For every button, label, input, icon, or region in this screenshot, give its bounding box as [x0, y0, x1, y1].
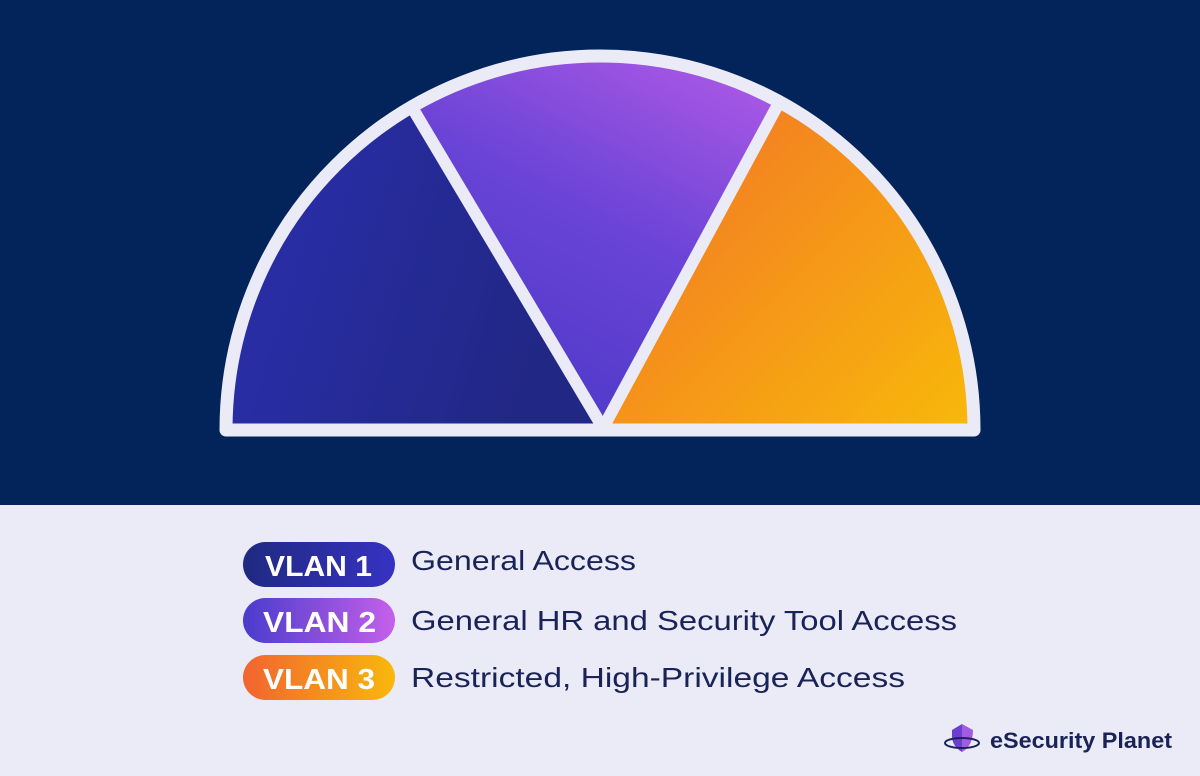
background: top dark band — [0, 0, 1200, 505]
segment: VLAN 3 — [612, 110, 968, 424]
icon: shield — [945, 724, 979, 752]
legend — [243, 542, 957, 700]
legend item: VLAN 3: Restricted, High-Privilege Access — [411, 662, 905, 693]
legend item: VLAN 1: General Access — [411, 545, 636, 576]
logo: eSecurity Planet — [945, 724, 1173, 753]
legend item: VLAN 1 — [243, 542, 636, 587]
legend item: VLAN 2: General HR and Security Tool Access — [411, 605, 957, 636]
legend item: VLAN 1: VLAN 1 — [265, 551, 372, 583]
segment: VLAN 1 — [232, 116, 594, 424]
legend item: VLAN 2: VLAN 2 — [263, 607, 376, 639]
legend item: VLAN 3: VLAN 3 — [263, 664, 375, 696]
legend item: VLAN 3 — [243, 655, 905, 700]
gauge chart — [200, 40, 1000, 432]
logo: eSecurity Planet: eSecurity Planet — [990, 728, 1173, 753]
segment: VLAN 2 — [420, 62, 771, 416]
legend item: VLAN 2 — [243, 598, 957, 643]
